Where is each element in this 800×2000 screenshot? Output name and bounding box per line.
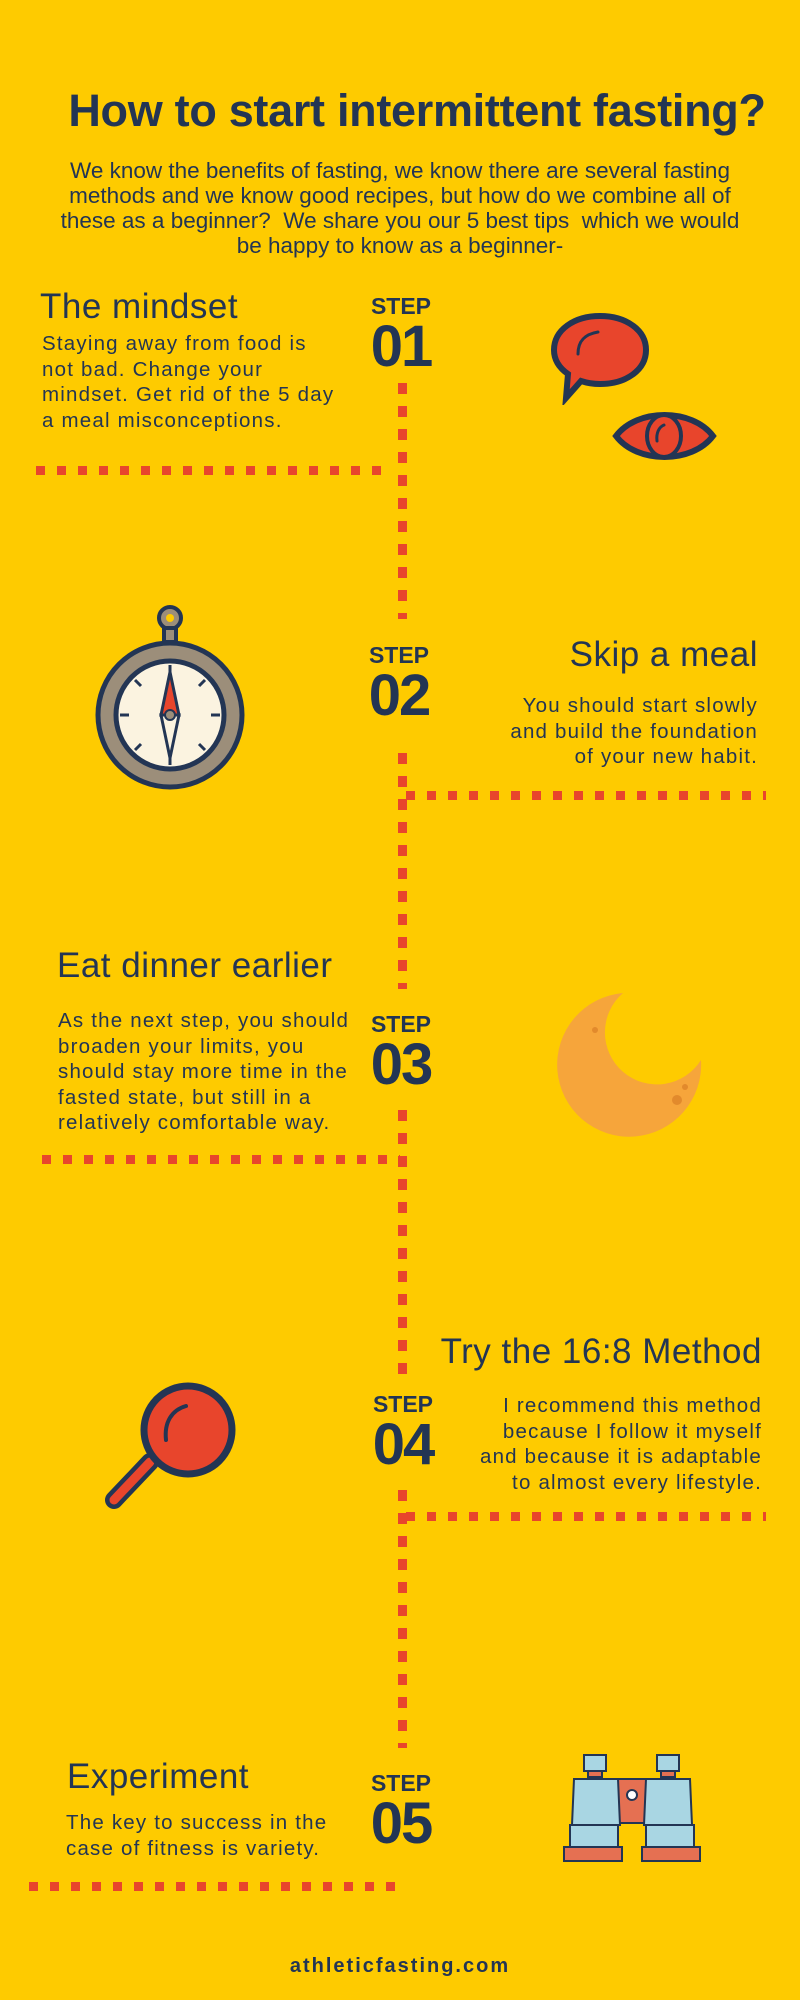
horizontal dotted line [42, 1155, 400, 1164]
vertical dotted line segment 2 [398, 753, 407, 989]
text: mindset body: not bad. Change your [42, 358, 263, 380]
text: skip a meal body [510, 694, 758, 768]
icon: moon [557, 993, 702, 1137]
footer: website: athleticfasting.com [290, 1955, 510, 1977]
text: 16:8 body: to almost every lifestyle. [512, 1470, 762, 1494]
heading: eat dinner earlier: Eat dinner earlier [57, 946, 333, 985]
panel: step 1 [36, 287, 432, 475]
intro text [60, 158, 739, 258]
horizontal dotted line [406, 1512, 766, 1521]
icon: compass [96, 605, 244, 790]
title: How to start intermittent fasting? [68, 85, 766, 136]
intro text: We know the benefits of fasting, we know there are several fasting [70, 158, 730, 183]
horizontal dotted line [36, 466, 381, 475]
vertical dotted line segment 3 [398, 1110, 407, 1382]
text: experiment body: The key to success in the [66, 1811, 327, 1834]
text: eat dinner body: fasted state, but still in a [58, 1086, 312, 1108]
panel: step 2 [369, 635, 766, 800]
vertical dotted line segment 1 [398, 383, 407, 619]
step label 02: 02 [369, 663, 429, 728]
heading: the mindset: The mindset [40, 287, 238, 326]
intro text: these as a beginner? We share you our 5 best tips which we would [61, 208, 739, 233]
text: mindset body: mindset. Get rid of the 5 day [42, 383, 334, 406]
step label 01: STEP [371, 293, 431, 319]
text: skip a meal body: and build the foundation [510, 720, 758, 742]
text: 16:8 body [480, 1394, 762, 1494]
text: eat dinner body: broaden your limits, you [58, 1034, 304, 1058]
step label 05: STEP [371, 1770, 431, 1796]
heading: experiment: Experiment [67, 1757, 249, 1796]
vertical dotted line segment 4 [398, 1490, 407, 1748]
panel: step 5 [29, 1757, 432, 1891]
text: eat dinner body: relatively comfortable way. [58, 1111, 330, 1134]
text: experiment body [66, 1811, 327, 1860]
text: 16:8 body: I recommend this method [503, 1394, 762, 1417]
step label 04: STEP [373, 1391, 433, 1417]
icon: speech bubble [551, 313, 649, 405]
step label 04: 04 [373, 1412, 433, 1477]
icon: magnifier [105, 1382, 236, 1509]
text: skip a meal body: You should start slowly [523, 694, 758, 717]
text: mindset body: Staying away from food is [42, 332, 307, 355]
text: eat dinner body: should stay more time in the [58, 1060, 348, 1083]
icon: binoculars [563, 1754, 701, 1862]
text: 16:8 body: because I follow it myself [503, 1420, 762, 1442]
intro text: methods and we know good recipes, but how do we combine all of [69, 183, 731, 208]
heading: try the 16:8 method: Try the 16:8 Method [441, 1332, 762, 1371]
step label 05: 05 [371, 1791, 431, 1856]
text: mindset body: a meal misconceptions. [42, 408, 283, 432]
text: eat dinner body: As the next step, you should [58, 1009, 349, 1032]
step label 03: STEP [371, 1011, 431, 1037]
text: mindset body [42, 332, 334, 432]
step label 02: STEP [369, 642, 429, 668]
panel: step 3 [42, 946, 432, 1164]
step label 03: 03 [371, 1032, 431, 1097]
horizontal dotted line [406, 791, 766, 800]
panel: step 4 [373, 1332, 766, 1521]
text: 16:8 body: and because it is adaptable [480, 1445, 762, 1468]
text: experiment body: case of fitness is variety. [66, 1836, 320, 1860]
text: skip a meal body: of your new habit. [575, 745, 758, 768]
icon: eye [612, 412, 717, 460]
intro text: be happy to know as a beginner- [237, 233, 563, 258]
heading: skip a meal: Skip a meal [570, 635, 758, 674]
text: eat dinner body [58, 1009, 349, 1134]
step label 01: 01 [371, 314, 431, 379]
horizontal dotted line [29, 1882, 407, 1891]
